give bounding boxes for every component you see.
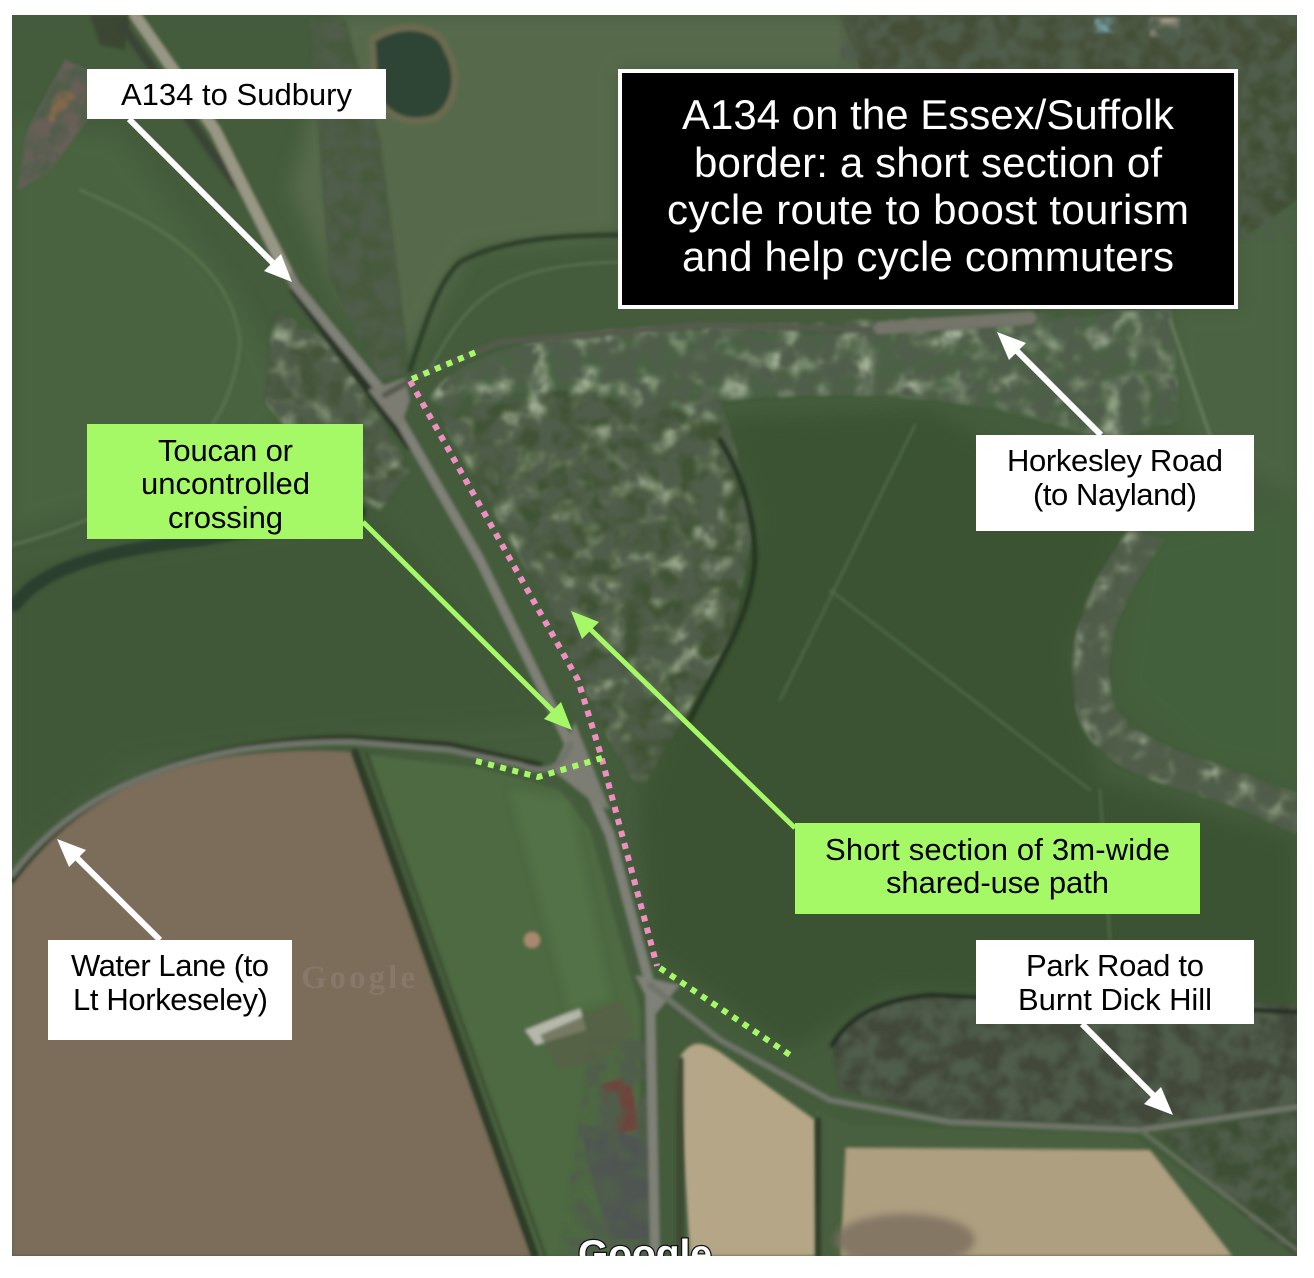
- paddock strip: [368, 755, 640, 1256]
- label: Park Road: Burnt Dick Hill: [1018, 982, 1212, 1017]
- label: Horkesley Road: Horkesley Road: [1007, 443, 1223, 478]
- side roads: [12, 742, 570, 875]
- label: shared-use path: Short section of 3m-wide: [825, 832, 1170, 867]
- green dotted line: south link: [660, 968, 790, 1055]
- brown field: [12, 751, 532, 1256]
- title box: and help cycle commuters: [682, 233, 1174, 280]
- woodland: [462, 318, 1156, 430]
- label: crossing: crossing: [168, 500, 283, 535]
- arrow: A134 to Sudbury: [129, 119, 292, 282]
- road: A134: [272, 233, 662, 1256]
- green dotted line: north link: [412, 352, 476, 379]
- field tracks: [12, 190, 240, 545]
- arrow: shared-use path: [571, 611, 795, 828]
- pale fields: [678, 1044, 818, 1256]
- label: Water Lane: [48, 940, 292, 1040]
- title box: A134 on the Essex/Suffolk: [682, 91, 1175, 138]
- label: Water Lane: Lt Horkeseley): [73, 982, 268, 1017]
- label: A134 to Sudbury: A134 to Sudbury: [121, 77, 352, 112]
- left field: [26, 146, 266, 408]
- hedge lines: [12, 738, 540, 880]
- label: crossing: [87, 424, 363, 539]
- arrow: Water Lane: [57, 839, 160, 940]
- right field: [640, 410, 1297, 1050]
- top fields: [291, 15, 849, 353]
- label: shared-use path: shared-use path: [886, 865, 1109, 900]
- title box: [620, 71, 1236, 307]
- arrow: Park Road: [1082, 1024, 1173, 1115]
- farm: [18, 60, 87, 190]
- pink dotted line: shared-use path: [410, 381, 657, 966]
- arrow: crossing: [363, 522, 572, 730]
- title box: cycle route to boost tourism: [667, 186, 1189, 233]
- green dotted line: crossing link: [476, 758, 602, 777]
- pond: [372, 28, 455, 121]
- label: Horkesley Road: (to Nayland): [1033, 477, 1197, 512]
- label: A134 to Sudbury: [87, 69, 386, 119]
- faint watermark: Google: [301, 960, 415, 996]
- label: Park Road: Park Road to: [1026, 948, 1204, 983]
- label: crossing: Toucan or: [158, 433, 293, 468]
- label: crossing: uncontrolled: [141, 466, 310, 501]
- woodland texture: [265, 310, 1297, 835]
- label: shared-use path: [795, 823, 1200, 914]
- label: Horkesley Road: [976, 435, 1254, 531]
- title box: border: a short section of: [694, 139, 1162, 186]
- junctions: [368, 378, 410, 430]
- label: Park Road: [976, 940, 1254, 1024]
- label: Water Lane: Water Lane (to: [71, 948, 269, 983]
- buildings near top right: [1095, 18, 1115, 32]
- map logo: Google: [578, 1233, 712, 1276]
- arrow: Horkesley Road: [997, 332, 1101, 435]
